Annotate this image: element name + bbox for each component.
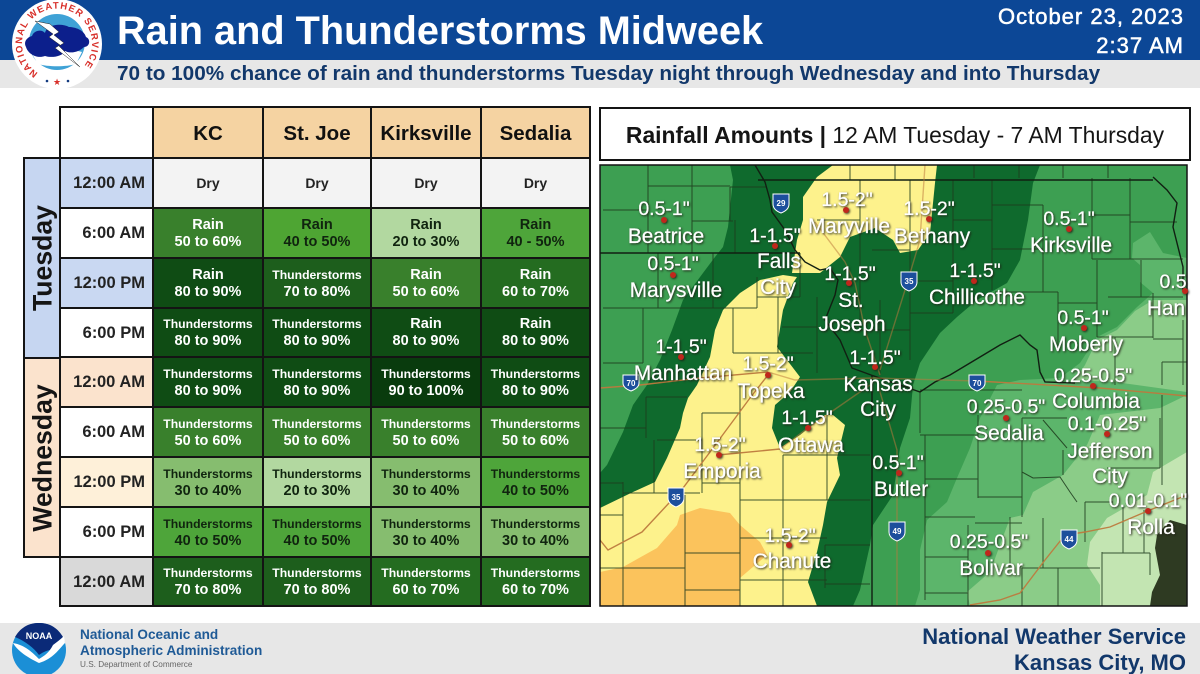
cell <box>372 358 480 406</box>
icon: National Weather Service logo: ★ <box>53 77 61 87</box>
cell: 20 to 30% <box>284 482 350 498</box>
cell <box>154 159 262 207</box>
label: Kirksville <box>1030 208 1112 257</box>
cell: 50 to 60% <box>393 432 459 448</box>
time: Tuesday 6:00 AM: 6:00 AM <box>82 224 145 242</box>
map heading <box>599 107 1191 161</box>
label: Maryville <box>808 189 890 238</box>
label: Falls City: City <box>760 276 797 299</box>
cell <box>372 408 480 456</box>
label: Chillicothe: 1-1.5" <box>949 260 1001 282</box>
cell: 40 to 50% <box>284 234 350 250</box>
cell <box>264 508 370 556</box>
time: Thursday 12:00 AM <box>61 558 152 605</box>
cell <box>154 209 262 257</box>
label: Kansas City: Kansas <box>843 373 913 396</box>
cell <box>154 309 262 356</box>
time: Wednesday 12:00 AM <box>61 358 152 406</box>
panel: rainfall map <box>599 164 1190 607</box>
cell <box>264 558 370 605</box>
cell <box>264 259 370 307</box>
cell: Rain <box>410 266 442 282</box>
panel: Wednesday day label: Wednesday <box>28 384 58 531</box>
cell: 40 to 50% <box>284 532 350 548</box>
cell: Thunderstorms <box>272 366 362 380</box>
column heading: Kirksville <box>372 108 480 157</box>
panel: Tuesday day label <box>23 157 61 359</box>
cell: 70 to 80% <box>284 582 350 598</box>
rainfall zone: 1-1.5 inch <box>600 165 1040 606</box>
cell: 50 to 60% <box>393 284 459 300</box>
cell: 40 to 50% <box>502 482 569 498</box>
table corner <box>61 108 152 157</box>
icon: National Weather Service logo: NATIONAL WEATHER SERVICE <box>15 2 99 78</box>
cell: 60 to 70% <box>502 582 569 598</box>
label: Sedalia: Sedalia <box>974 422 1044 445</box>
cell: 30 to 40% <box>502 532 569 548</box>
cell <box>264 159 370 207</box>
time: Tuesday 6:00 PM <box>61 309 152 356</box>
cell: 30 to 40% <box>175 482 241 498</box>
map heading: Rainfall Amounts | 12 AM Tuesday - 7 AM Thursday <box>626 122 1164 148</box>
column heading: KC <box>154 108 262 157</box>
cell: Thunderstorms <box>163 317 253 331</box>
cell: Thunderstorms <box>272 268 362 282</box>
cell: Thunderstorms <box>272 416 362 430</box>
cell: Rain <box>192 216 224 232</box>
cell: Thunderstorms <box>491 366 580 380</box>
panel: precipitation chance table <box>59 106 591 607</box>
label: Emporia: 1.5-2" <box>694 434 746 456</box>
cell <box>154 408 262 456</box>
cell: Thunderstorms <box>381 416 471 430</box>
shield: I-70 west <box>623 375 639 391</box>
label: Kirksville: Kirksville <box>1030 234 1112 257</box>
label: Beatrice: Beatrice <box>628 225 704 248</box>
label: Sedalia <box>967 396 1045 445</box>
cell <box>264 309 370 356</box>
label: Hannibal, clipped: 0.5 <box>1159 271 1187 293</box>
cell: Thunderstorms <box>491 516 580 530</box>
panel: Wednesday day label <box>23 357 61 558</box>
time: Tuesday 12:00 AM <box>61 159 152 207</box>
rainfall zone: 1.5-2 inch north <box>792 165 937 273</box>
label: St. Joseph: Joseph <box>818 313 886 336</box>
label: Chillicothe <box>929 260 1025 309</box>
cell: 80 to 90% <box>175 333 241 349</box>
label: Maryville: Maryville <box>808 215 890 238</box>
time: Tuesday 12:00 PM: 12:00 PM <box>73 274 145 292</box>
cell <box>154 358 262 406</box>
label: Rolla: 0.01-0.1" <box>1109 490 1187 512</box>
rainfall zone: 0.01-0.1 inch <box>1087 452 1187 606</box>
cell <box>264 209 370 257</box>
cell: Rain <box>410 316 442 332</box>
cell: 80 to 90% <box>284 382 350 398</box>
cell: Rain <box>301 216 333 232</box>
city rainfall labels <box>628 189 1188 580</box>
shield: I-44: 44 <box>1065 535 1074 544</box>
cell: Dry <box>305 175 329 191</box>
cell: Thunderstorms <box>272 566 362 580</box>
cell <box>372 259 480 307</box>
label: Bethany: 1.5-2" <box>903 198 955 220</box>
label: St. Joseph <box>818 263 886 336</box>
cell: Thunderstorms <box>381 466 471 480</box>
cell <box>482 508 589 556</box>
cell: 50 to 60% <box>175 432 241 448</box>
cell: Rain <box>410 216 442 232</box>
cell <box>264 408 370 456</box>
label: Chanute: 1.5-2" <box>764 525 816 547</box>
cell: Thunderstorms <box>491 566 580 580</box>
cell: 20 to 30% <box>393 234 459 250</box>
label: Falls City: 1-1.5" <box>749 225 801 247</box>
column heading: Sedalia <box>482 108 589 157</box>
cell: Thunderstorms <box>163 566 253 580</box>
icon: NOAA logo: NOAA <box>26 631 53 641</box>
label: Topeka: 1.5-2" <box>742 353 794 375</box>
label: Marysville <box>630 253 722 302</box>
highways <box>600 165 1187 606</box>
cell: Rain <box>192 266 224 282</box>
label: Chillicothe: Chillicothe <box>929 286 1025 309</box>
cell: 40 to 50% <box>175 532 241 548</box>
column heading: Kirksville: Kirksville <box>380 122 472 145</box>
cell: Thunderstorms <box>163 366 253 380</box>
label: Bolivar: 0.25-0.5" <box>950 531 1028 553</box>
cell: Thunderstorms <box>381 366 471 380</box>
cell <box>482 159 589 207</box>
label: Kansas City: City <box>860 398 897 421</box>
cell <box>372 209 480 257</box>
label: St. Joseph: 1-1.5" <box>824 263 876 285</box>
label: Manhattan: 1-1.5" <box>655 336 707 358</box>
cell: 50 to 60% <box>284 432 350 448</box>
label: Moberly: 0.5-1" <box>1057 307 1109 329</box>
label: Beatrice <box>628 198 704 248</box>
office name: National Weather Service <box>922 624 1186 649</box>
cell <box>264 358 370 406</box>
time: Tuesday 6:00 PM: 6:00 PM <box>83 324 145 342</box>
label: Columbia: Columbia <box>1052 390 1140 413</box>
date and time <box>998 4 1184 58</box>
time: Wednesday 6:00 AM: 6:00 AM <box>82 423 145 441</box>
rainfall zone: 0.5-1 inch <box>600 165 1187 606</box>
label: Emporia: Emporia <box>683 460 761 483</box>
cell: 90 to 100% <box>389 382 463 398</box>
cell: Thunderstorms <box>381 516 471 530</box>
cell: 70 to 80% <box>284 284 350 300</box>
label: Hannibal, clipped <box>1147 271 1188 320</box>
cell <box>154 508 262 556</box>
shield: I-70 east <box>969 375 985 391</box>
time: Tuesday 12:00 AM: 12:00 AM <box>73 174 145 192</box>
NOAA name: Atmospheric Administration <box>80 642 262 658</box>
date and time: October 23, 2023 <box>998 4 1184 29</box>
label: Jefferson City <box>1067 413 1153 488</box>
cell: Dry <box>524 175 547 191</box>
cell: 80 to 90% <box>175 284 241 300</box>
cell: 80 to 90% <box>284 333 350 349</box>
shield: I-29 <box>773 194 789 213</box>
time: Thursday 12:00 AM: 12:00 AM <box>73 572 145 590</box>
column heading: St. Joe <box>264 108 370 157</box>
state boundaries and rivers <box>600 165 1183 606</box>
cell: 50 to 60% <box>175 234 241 250</box>
label: Topeka <box>737 353 805 403</box>
shield: I-70 west: 70 <box>627 379 636 388</box>
cell <box>154 259 262 307</box>
icon: NOAA logo <box>12 623 66 674</box>
label: Bolivar <box>950 531 1028 580</box>
header band <box>0 0 1200 60</box>
label: Bethany: Bethany <box>894 225 971 248</box>
label: Topeka: Topeka <box>737 380 805 403</box>
NOAA name <box>80 627 262 658</box>
map border <box>600 165 1187 606</box>
cell: Thunderstorms <box>163 516 253 530</box>
label: Ottawa: 1-1.5" <box>781 407 833 429</box>
label: Columbia <box>1052 365 1140 413</box>
cell: Thunderstorms <box>272 516 362 530</box>
subtitle: 70 to 100% chance of rain and thunderstorms Tuesday night through Wednesday and into Thursday <box>117 62 1100 85</box>
cell <box>154 458 262 506</box>
cell: 30 to 40% <box>393 482 459 498</box>
shield: I-35 north: 35 <box>905 277 914 286</box>
label: Ottawa <box>778 407 844 457</box>
label: Chanute: Chanute <box>753 550 831 573</box>
label: Marysville: 0.5-1" <box>647 253 699 275</box>
cell: Rain <box>520 316 551 332</box>
cell: 80 to 90% <box>502 382 569 398</box>
NOAA name: National Oceanic and <box>80 627 218 642</box>
label: Kansas City: 1-1.5" <box>849 347 901 369</box>
shield: I-49: 49 <box>893 527 902 536</box>
shield: I-35 south: 35 <box>672 493 681 502</box>
label: Columbia: 0.25-0.5" <box>1054 365 1132 387</box>
label: Jefferson City: City <box>1092 465 1129 488</box>
cell <box>372 458 480 506</box>
panel: Tuesday day label: Tuesday <box>28 205 58 311</box>
rainfall zone: 0.25-0.5 inch <box>915 232 1187 606</box>
label: Butler: Butler <box>874 478 928 501</box>
cell <box>372 159 480 207</box>
shield: I-35 north <box>901 272 917 291</box>
label: Bolivar: Bolivar <box>959 557 1023 580</box>
cell: Thunderstorms <box>163 466 253 480</box>
time: Tuesday 6:00 AM <box>61 209 152 257</box>
label: Butler: 0.5-1" <box>872 452 924 474</box>
label: Rolla: Rolla <box>1127 516 1175 539</box>
title: Rain and Thunderstorms Midweek <box>117 9 763 53</box>
date and time: 2:37 AM <box>1096 33 1184 58</box>
time: Wednesday 6:00 AM <box>61 408 152 456</box>
cell: Rain <box>520 216 551 232</box>
label: Kirksville: 0.5-1" <box>1043 208 1095 230</box>
cell <box>372 508 480 556</box>
time: Wednesday 12:00 PM <box>61 458 152 506</box>
rainfall zone: 0.1-0.25 inch <box>967 300 1187 606</box>
label: Jefferson City: Jefferson <box>1067 440 1153 463</box>
shield: I-44 <box>1061 530 1077 549</box>
footer band <box>0 623 1200 674</box>
cell: 30 to 40% <box>393 532 459 548</box>
cell <box>482 458 589 506</box>
department line: U.S. Department of Commerce <box>80 660 192 669</box>
label: Beatrice: 0.5-1" <box>638 198 690 220</box>
cell: 60 to 70% <box>502 284 569 300</box>
label: Chanute <box>753 525 831 573</box>
label: Falls City: Falls <box>757 250 801 273</box>
time: Tuesday 12:00 PM <box>61 259 152 307</box>
label: Maryville: 1.5-2" <box>821 189 873 211</box>
cell: Thunderstorms <box>163 416 253 430</box>
shield: I-35 south <box>668 488 684 507</box>
rainfall zone: 2-3 inch <box>600 508 767 606</box>
label: Emporia <box>683 434 761 483</box>
label: Moberly <box>1049 307 1124 356</box>
cell: Thunderstorms <box>272 466 362 480</box>
label: Kansas City <box>843 347 913 421</box>
cell <box>372 309 480 356</box>
cell <box>482 309 589 356</box>
label: Manhattan <box>634 336 732 385</box>
cell <box>264 458 370 506</box>
time: Wednesday 12:00 PM: 12:00 PM <box>73 473 145 491</box>
cell: Thunderstorms <box>491 466 580 480</box>
label: Falls City <box>749 225 801 299</box>
cell: 70 to 80% <box>175 582 241 598</box>
shield: I-70 east: 70 <box>973 379 982 388</box>
cell: Dry <box>196 175 220 191</box>
highway shields <box>623 194 1077 549</box>
cell <box>154 558 262 605</box>
shield: I-49 <box>889 522 905 541</box>
label: Manhattan: Manhattan <box>634 362 732 385</box>
cell <box>482 358 589 406</box>
cell <box>482 259 589 307</box>
label: Moberly: Moberly <box>1049 333 1124 356</box>
cell: 60 to 70% <box>393 582 459 598</box>
label: Hannibal, clipped: Han <box>1147 297 1185 320</box>
cell: 80 to 90% <box>175 382 241 398</box>
label: Butler <box>872 452 928 501</box>
label: Rolla <box>1109 490 1187 539</box>
label: Ottawa: Ottawa <box>778 434 844 457</box>
cell: Thunderstorms <box>491 416 580 430</box>
label: St. Joseph: St. <box>838 289 864 312</box>
cell: 50 to 60% <box>502 432 569 448</box>
rainfall zone: 1.5-2 inch <box>600 275 845 606</box>
label: Sedalia: 0.25-0.5" <box>967 396 1045 418</box>
shield: I-29: 29 <box>777 199 786 208</box>
label: Jefferson City: 0.1-0.25" <box>1068 413 1146 435</box>
county boundaries <box>600 165 1187 606</box>
time: Wednesday 6:00 PM: 6:00 PM <box>83 523 145 541</box>
terrain: beyond data <box>1150 520 1187 606</box>
label: Bethany <box>894 198 971 248</box>
label: Marysville: Marysville <box>630 279 722 302</box>
cell <box>482 209 589 257</box>
subtitle band <box>0 60 1200 88</box>
cell: Rain <box>520 266 551 282</box>
cell: Thunderstorms <box>381 566 471 580</box>
cell: 80 to 90% <box>502 333 569 349</box>
cell <box>372 558 480 605</box>
time: Wednesday 6:00 PM <box>61 508 152 556</box>
cell: 80 to 90% <box>393 333 459 349</box>
time: Wednesday 12:00 AM: 12:00 AM <box>73 373 145 391</box>
column heading: KC: KC <box>193 122 223 145</box>
cell: Dry <box>414 175 438 191</box>
column heading: Sedalia: Sedalia <box>500 122 571 145</box>
office name <box>922 624 1186 674</box>
column heading: St. Joe: St. Joe <box>283 122 351 145</box>
cell: Thunderstorms <box>272 317 362 331</box>
cell: 40 - 50% <box>506 234 565 250</box>
cell <box>482 408 589 456</box>
cell <box>482 558 589 605</box>
